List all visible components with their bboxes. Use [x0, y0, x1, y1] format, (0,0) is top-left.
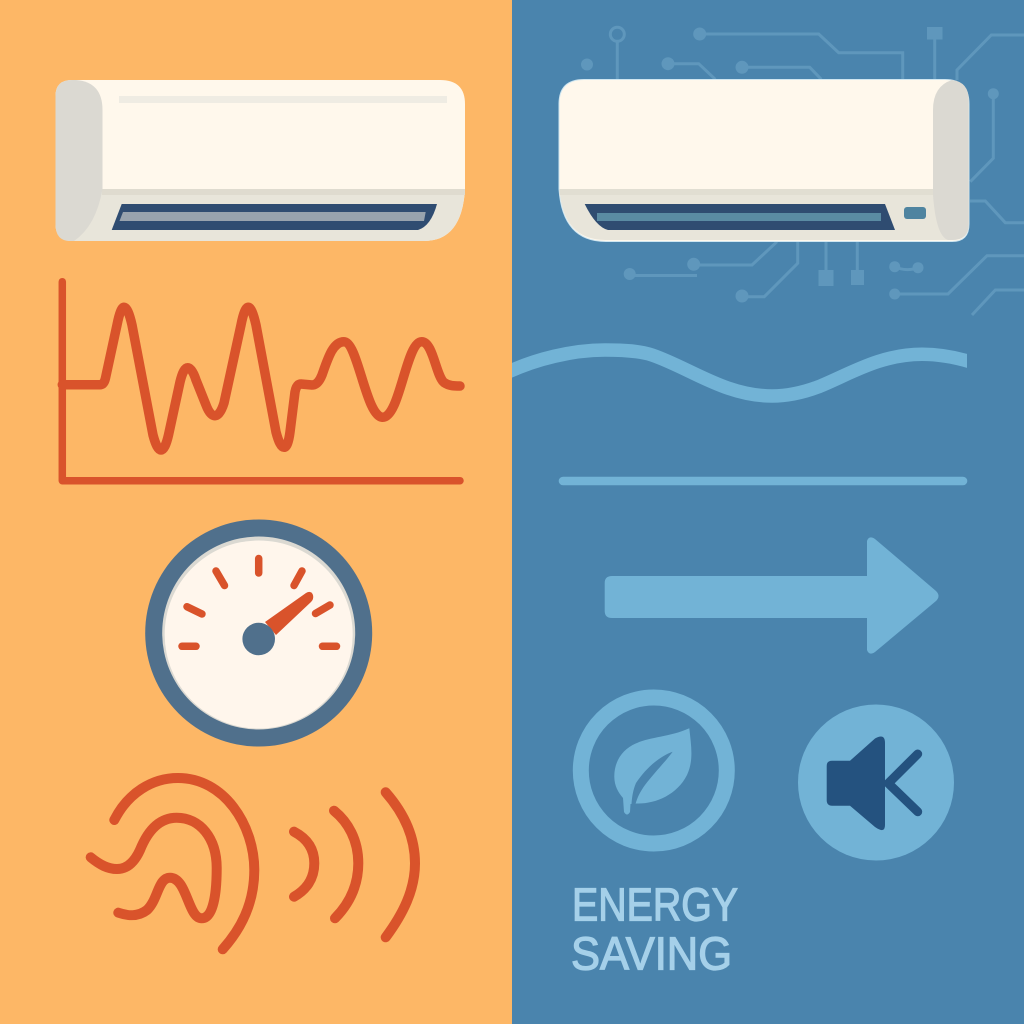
- air conditioner: right unit: [558, 79, 970, 242]
- leaf body: [614, 728, 691, 814]
- gauge needle: [265, 592, 313, 635]
- panel: left orange background: [0, 0, 512, 1024]
- right unit vent: [585, 204, 895, 230]
- right unit outline glow: [558, 79, 970, 242]
- chart axes: [62, 282, 460, 481]
- leaf ring: [581, 698, 727, 844]
- label line two: SAVING: [571, 927, 732, 979]
- right unit status button: [904, 207, 926, 219]
- arrow: [605, 537, 938, 654]
- gauge ticks: [182, 558, 336, 646]
- icon: energy saving leaf: [581, 698, 727, 844]
- text: energy saving label: [571, 879, 738, 979]
- speaker badge: [798, 704, 954, 860]
- stable baseline: [559, 477, 967, 485]
- chart wave line: [62, 307, 460, 450]
- right unit body: [560, 80, 969, 241]
- sound wave large: [386, 792, 415, 937]
- left unit body: [56, 80, 465, 241]
- sound wave small: [294, 832, 314, 897]
- leaf vein: [632, 752, 673, 804]
- label line one: ENERGY: [572, 879, 738, 931]
- left unit top strip: [119, 96, 447, 103]
- speaker chevron: [888, 754, 918, 812]
- speaker body: [827, 737, 885, 830]
- left unit vent: [112, 204, 437, 230]
- gauge: [145, 520, 372, 746]
- ear outer curve: [114, 778, 254, 949]
- left unit lower panel: [56, 189, 465, 241]
- air conditioner: left unit: [56, 80, 465, 241]
- gauge hub: [242, 623, 275, 655]
- panel: right blue background: [512, 0, 1024, 1024]
- right unit vent strip: [597, 213, 881, 221]
- gauge outer ring: [145, 520, 372, 746]
- left unit vent strip: [120, 212, 426, 221]
- sound wave medium: [334, 811, 358, 918]
- gauge face: [162, 536, 355, 730]
- chart: fluctuating temperature line: [62, 282, 460, 481]
- wave line: smooth airflow: [500, 350, 980, 396]
- right unit lower panel: [560, 189, 969, 240]
- right unit side cap: [933, 80, 969, 240]
- left unit side cap: [56, 80, 102, 241]
- icon: quiet speaker: [798, 704, 954, 860]
- icon: ear with sound waves: [91, 778, 415, 949]
- circuit pattern background: [581, 27, 1024, 315]
- ear inner curve: [91, 818, 217, 918]
